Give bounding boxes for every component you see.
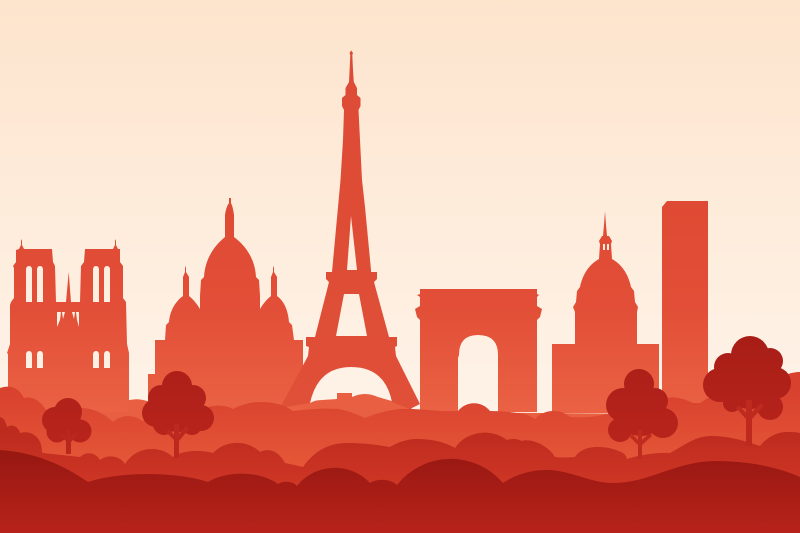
landmark: Tour Montparnasse bbox=[662, 201, 708, 404]
hills: front shrub layer bbox=[0, 417, 800, 533]
hills: dark foreground bbox=[0, 450, 800, 533]
tree: left of the Eiffel Tower bbox=[142, 371, 214, 458]
landmark: Sacre-Coeur basilica bbox=[148, 198, 303, 412]
landmark: Arc de Triomphe bbox=[415, 289, 542, 412]
tree: large right bbox=[703, 336, 791, 446]
distant hills bbox=[0, 393, 800, 533]
landmark: Notre-Dame cathedral bbox=[7, 239, 129, 412]
landmark: Les Invalides dome bbox=[552, 211, 659, 413]
hills: middle layer bbox=[0, 372, 800, 533]
landmark: Eiffel Tower bbox=[280, 50, 420, 409]
tree: right of Les Invalides bbox=[606, 369, 678, 459]
tree: small left bbox=[42, 398, 92, 454]
